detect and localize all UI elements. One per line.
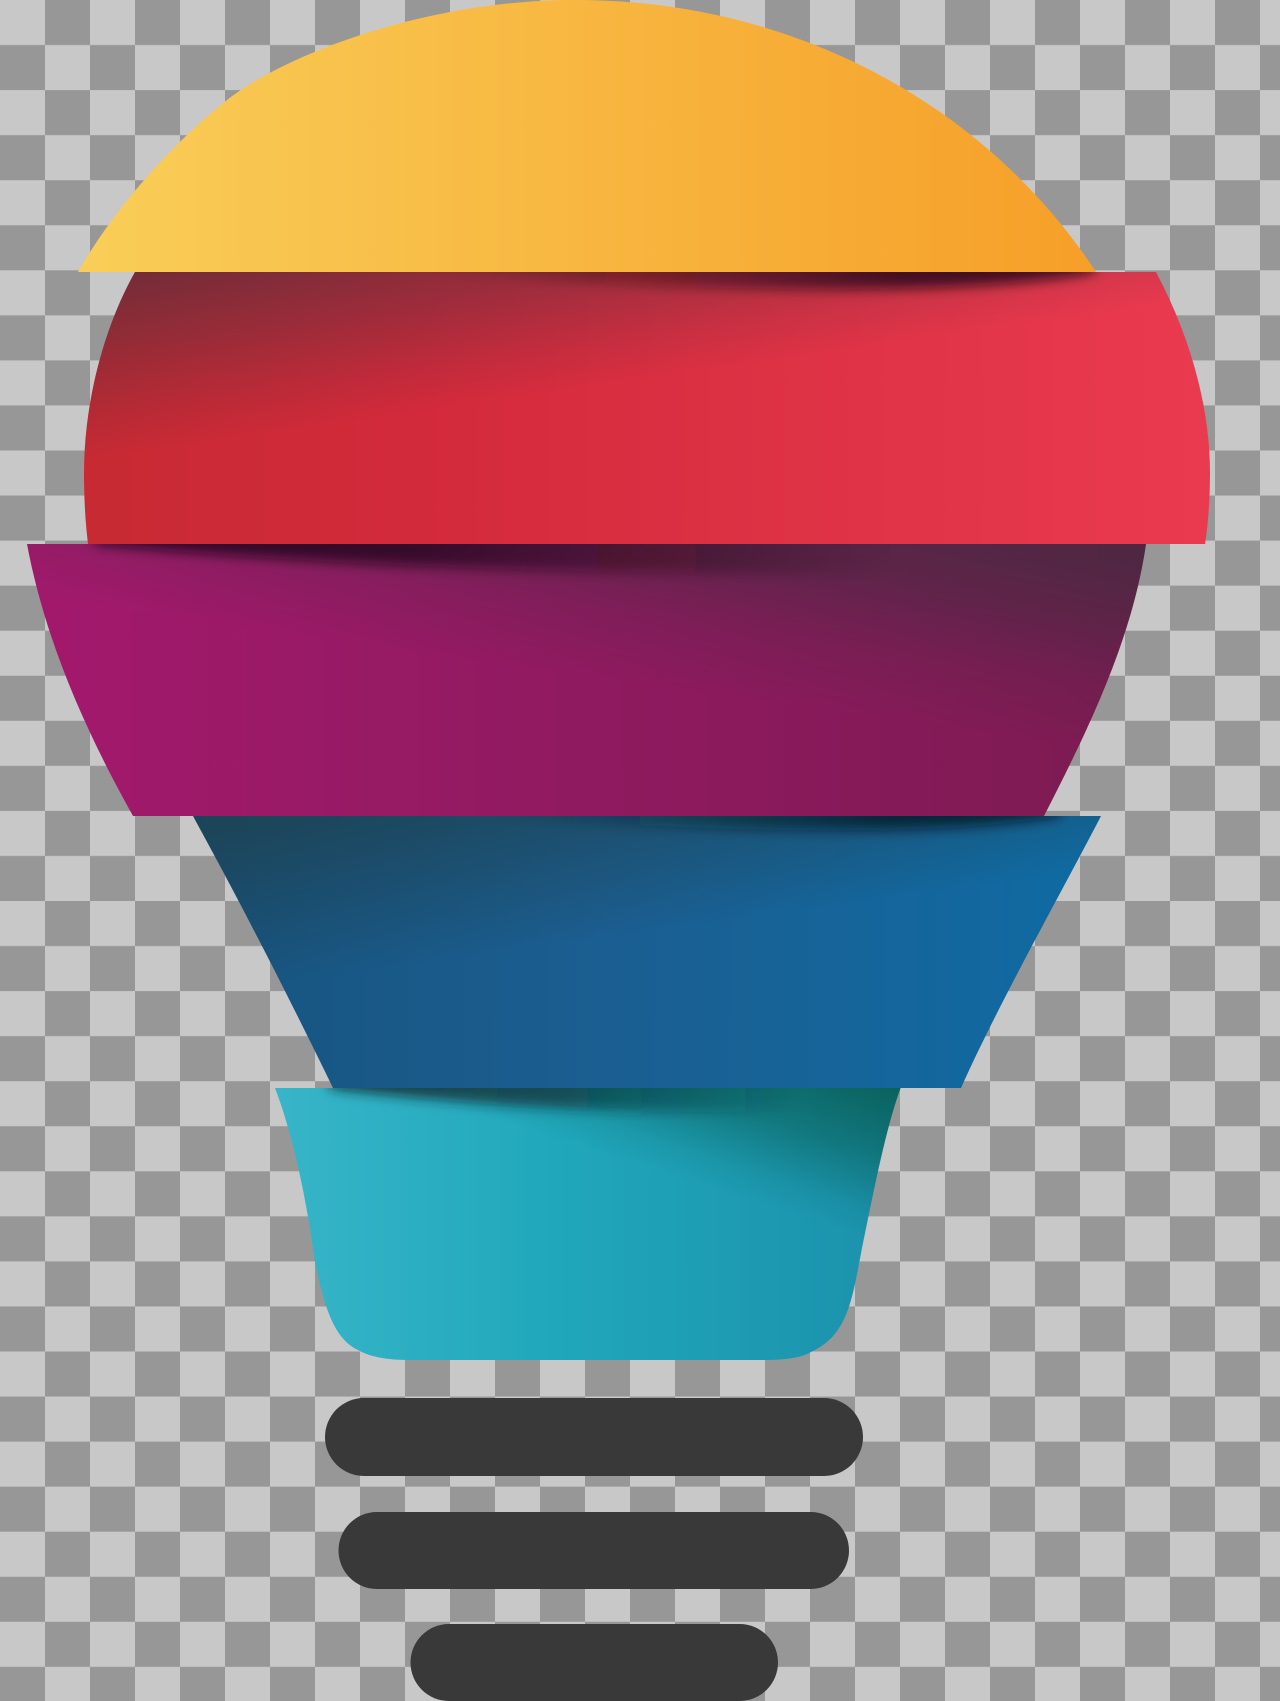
- blue segment: [193, 816, 1101, 1088]
- base bar middle: [338, 1512, 849, 1589]
- teal segment: [275, 1088, 901, 1360]
- yellow segment: [78, 0, 1096, 272]
- base bar bottom: [410, 1624, 778, 1701]
- base bar top: [325, 1398, 863, 1476]
- bulb screw base bars: [325, 1398, 863, 1701]
- red segment: [80, 260, 1220, 555]
- purple segment: [27, 544, 1146, 816]
